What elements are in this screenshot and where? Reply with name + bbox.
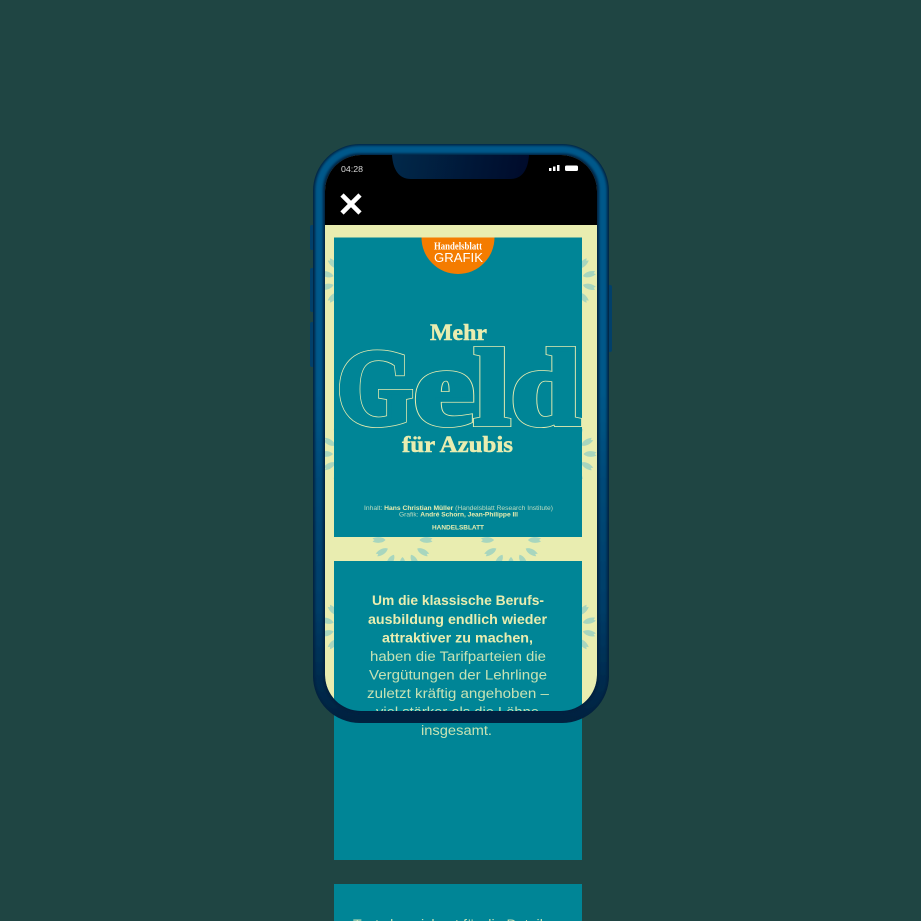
title: G — [337, 329, 413, 448]
title: l — [474, 329, 510, 448]
intro bold lead: attraktiver zu machen, — [382, 630, 533, 646]
intro body: insgesamt. — [421, 723, 492, 738]
title: d — [511, 329, 580, 448]
notch — [392, 155, 529, 179]
status bar: time: 04:28 — [341, 165, 364, 174]
credits: Grafik: André Schorn, Jean-Philippe Ill — [399, 512, 518, 518]
title: G — [337, 329, 413, 448]
icon: close — [342, 195, 360, 213]
screen: cream backdrop with leaf wreaths — [320, 155, 597, 711]
title: Mehr — [430, 320, 487, 345]
logo badge: Handelsblatt — [434, 242, 483, 252]
title: d — [511, 329, 580, 448]
intro body: Vergütungen der Lehrlinge — [369, 668, 547, 682]
intro body: zuletzt kräftig angehoben – — [367, 686, 550, 701]
title — [337, 320, 580, 457]
logo badge: GRAFIK — [434, 250, 483, 265]
title: e — [414, 329, 474, 448]
credits — [364, 505, 553, 532]
intro body: haben die Tarifparteien die — [370, 649, 546, 664]
panel: next section — [334, 884, 582, 921]
credits: HANDELSBLATT — [432, 524, 484, 532]
leaf wreaths — [320, 251, 596, 657]
title: e — [414, 329, 474, 448]
intro bold lead: ausbildung endlich wieder — [368, 612, 548, 627]
logo badge — [422, 238, 494, 274]
title: für Azubis — [402, 432, 513, 457]
title: l — [474, 329, 510, 448]
credits: Inhalt: Hans Christian Müller (Handelsblatt Research Institute) — [364, 505, 553, 512]
intro body: viel stärker als die Löhne — [376, 704, 539, 720]
panel: intro text — [334, 561, 582, 860]
panel: cover — [334, 238, 582, 537]
intro bold lead — [368, 593, 548, 646]
phone side buttons — [310, 225, 612, 367]
phone frame — [310, 140, 612, 730]
intro body — [367, 649, 550, 738]
status bar: signal and battery — [549, 165, 578, 171]
top black app bar — [325, 155, 597, 225]
intro bold lead: Um die klassische Berufs- — [372, 593, 544, 608]
